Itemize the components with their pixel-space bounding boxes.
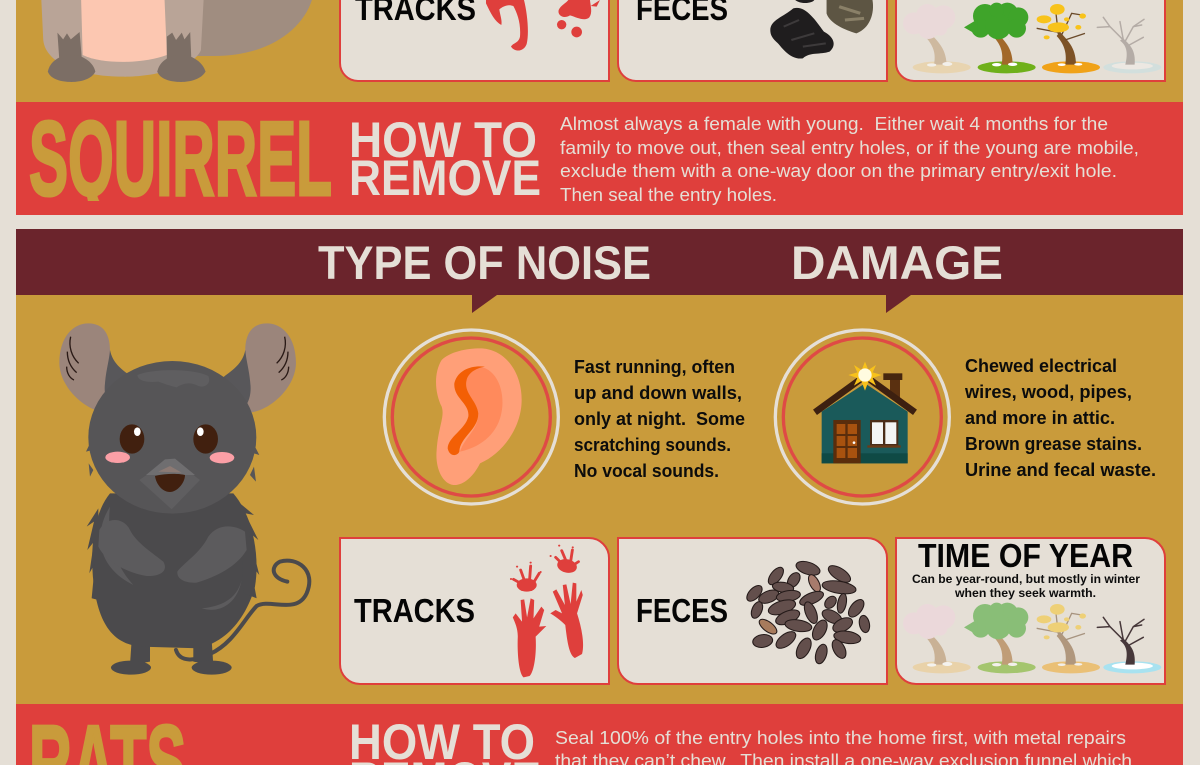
heading: how to remove: HOW TO [349,112,537,168]
text: squirrel removal instructions: Then seal the entry holes. [560,185,777,205]
icon: rat droppings [744,559,871,665]
text: squirrel removal instructions: exclude them with a one-way door on the primary entry/exit hole. [560,161,1117,181]
text: damage description: Urine and fecal waste. [965,460,1156,480]
heading: time of year: TIME OF YEAR [918,537,1133,574]
card: rat time of year [896,537,1165,684]
text: noise description: scratching sounds. [574,435,731,455]
head [88,361,256,514]
arm shadows [100,507,242,610]
tail [176,561,309,659]
fur tufts [87,503,259,600]
eyes [120,424,218,454]
card: squirrel feces [618,0,887,81]
illustration: rat [59,323,309,675]
text: squirrel removal instructions: Almost always a female with young. Either wait 4 months for the [560,114,1108,134]
cheeks [105,452,234,463]
illustration: squirrel lower body [41,0,312,82]
pointer: damage [886,295,911,313]
text: damage description: Brown grease stains. [965,434,1142,454]
panel: squirrel [16,0,1183,102]
text: damage description: wires, wood, pipes, [964,382,1132,402]
icon: house in circle [775,330,949,504]
text: damage description: Chewed electrical [965,356,1117,376]
banner: squirrel how to remove [16,100,1183,218]
text: rat removal instructions [555,728,1132,765]
icon: four season trees [903,3,1161,73]
text: noise description: Fast running, often [574,357,735,377]
heading: type of noise: TYPE OF NOISE [318,236,651,289]
card: rat tracks [340,538,609,684]
icon: rat tracks [510,545,583,677]
card: rat feces: FECES [636,592,728,629]
text: time of year description: when they seek warmth. [954,586,1096,600]
icon: squirrel droppings [770,0,873,59]
text: noise description: No vocal sounds. [574,461,719,481]
text: damage description [964,356,1156,480]
panel: rats [16,229,1183,704]
text: time of year description [912,572,1140,600]
icon: four season trees [903,603,1161,673]
card: squirrel time of year [896,0,1165,81]
pointer: type of noise [472,295,497,313]
banner: rats how to remove [16,704,1183,765]
text: noise description: only at night. Some [574,409,745,429]
card: rat feces [618,538,887,684]
icon: ear in circle [384,330,558,504]
text: rat removal instructions: Seal 100% of the entry holes into the home first, with metal repairs [555,728,1126,748]
left ear [59,323,136,413]
text: time of year description: Can be year-round, but mostly in winter [912,572,1140,586]
snout and mouth [139,459,200,509]
text: noise description: up and down walls, [574,383,742,403]
text: damage description: and more in attic. [965,408,1115,428]
right ear [219,323,296,413]
card: rat tracks: TRACKS [354,592,475,629]
heading: damage: DAMAGE [791,236,1003,289]
heading: squirrel: SQUIRREL [29,100,332,218]
heading: how to remove [349,112,541,206]
icon: squirrel tracks [486,0,600,51]
body [92,493,257,648]
text: squirrel removal instructions: family to move out, then seal entry holes, or if the young are mobile, [560,138,1139,158]
text: noise description [574,357,745,481]
arms [98,520,165,576]
heading: how to remove: REMOVE [349,150,541,206]
header band [16,229,1183,313]
legs and feet [111,640,232,675]
text: squirrel removal instructions [560,114,1139,205]
card: squirrel tracks [340,0,609,81]
